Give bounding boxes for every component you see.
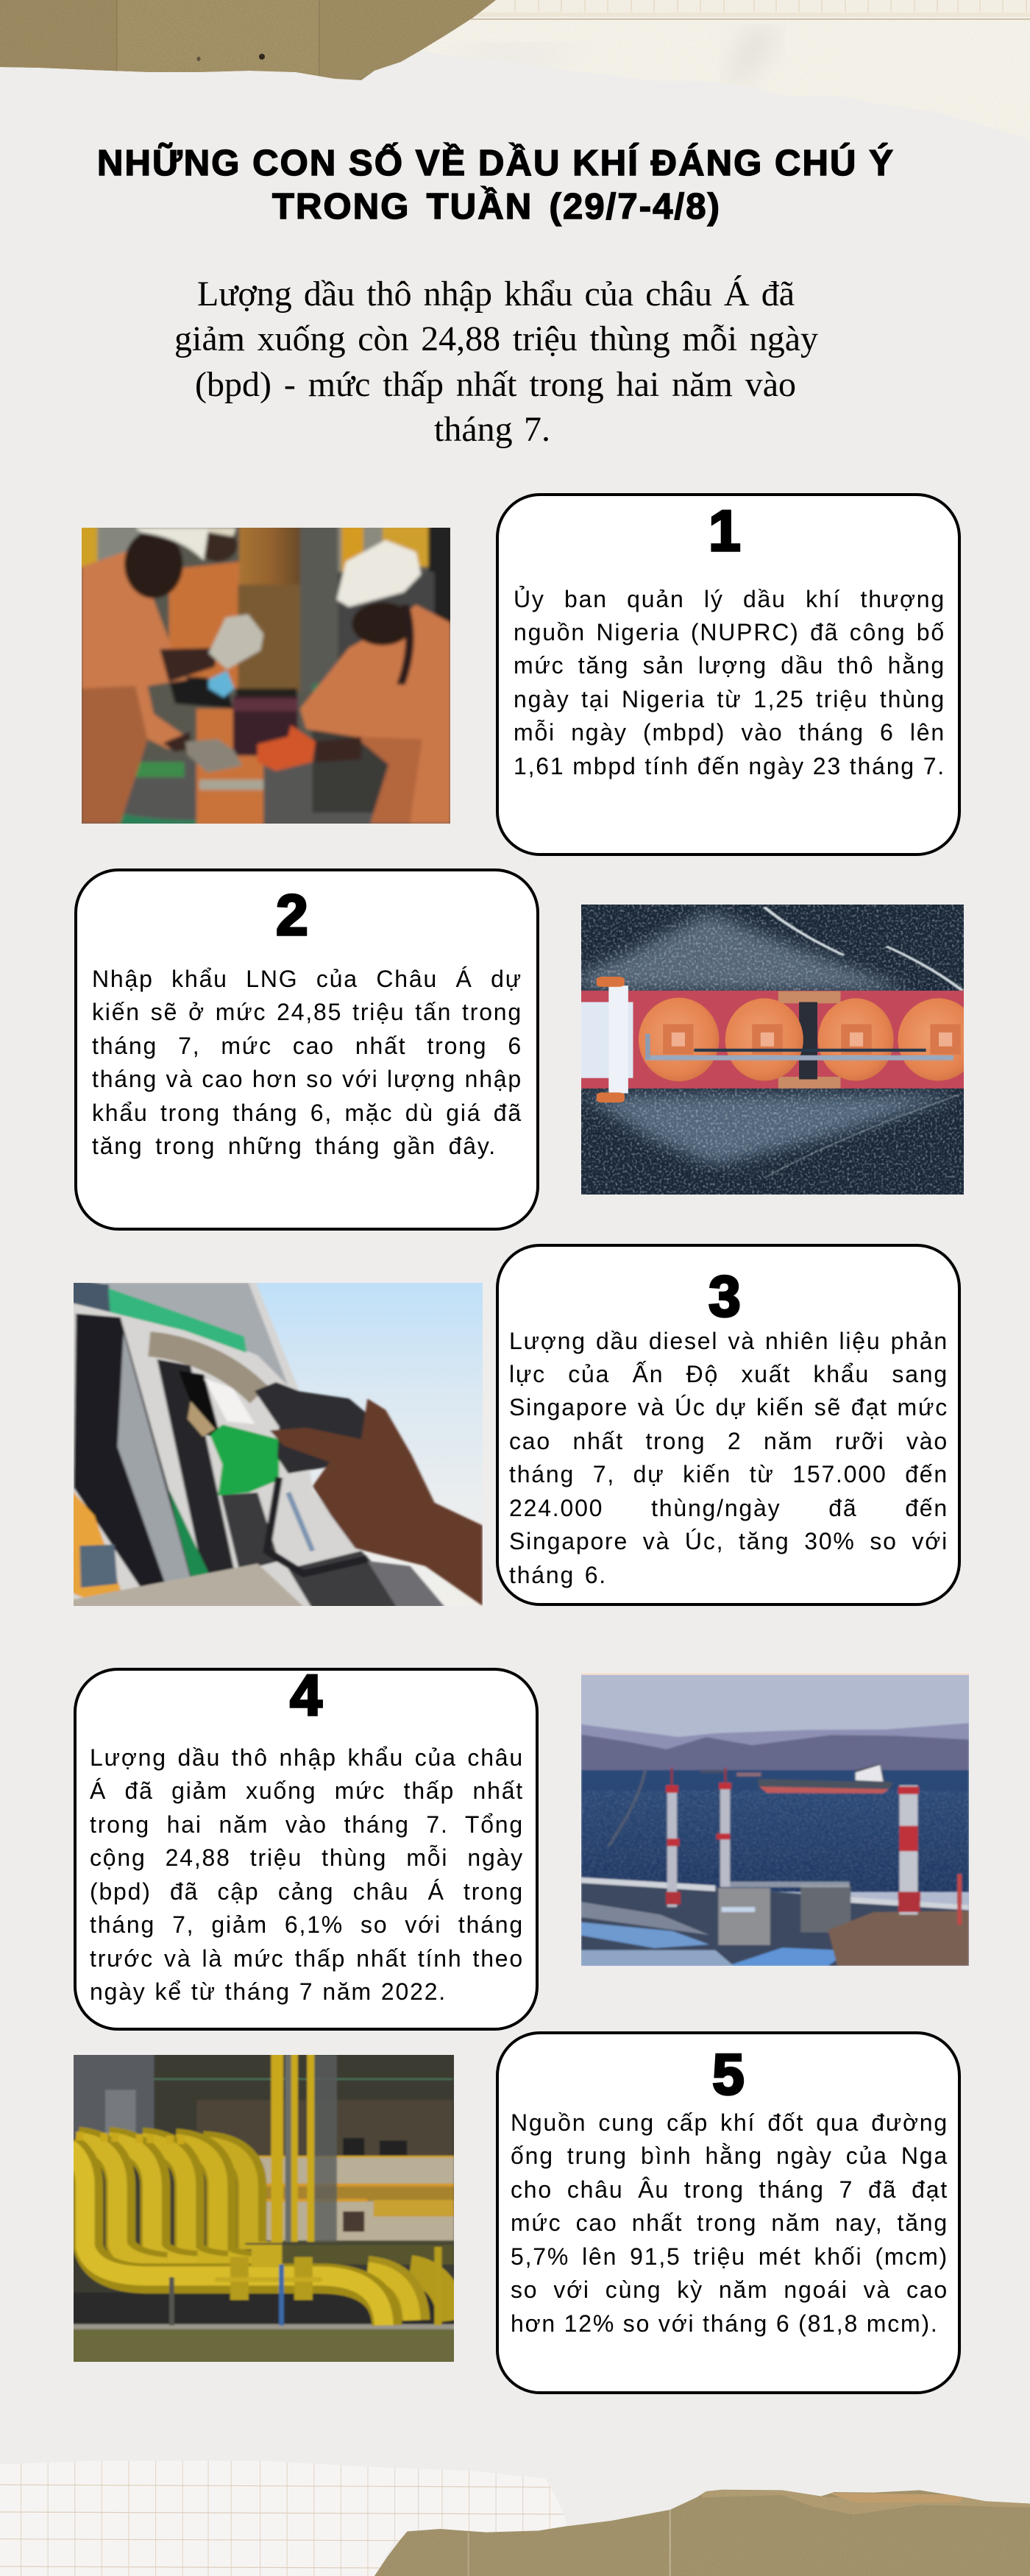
text: fact 5 bbox=[511, 2109, 948, 2337]
text: fact 3: tháng 7, dự kiến từ 157.000 đến bbox=[509, 1461, 948, 1487]
torn paper header background bbox=[0, 0, 1030, 137]
text: fact 2: tăng trong những tháng gần đây. bbox=[92, 1133, 497, 1159]
title: TRONG TUẦN (29/7-4/8) bbox=[272, 187, 721, 227]
text: fact 4: Lượng dầu thô nhập khẩu của châu bbox=[90, 1744, 524, 1771]
subtitle: tháng 7. bbox=[434, 410, 550, 449]
text: fact 4: (bpd) đã cập cảng châu Á trong bbox=[90, 1878, 524, 1905]
graph paper scrap bbox=[0, 2461, 564, 2576]
text: fact 3 bbox=[509, 1328, 948, 1588]
text: fact 5: mức cao nhất trong năm nay, tăng bbox=[511, 2209, 948, 2236]
text: fact 2: khẩu trong tháng 6, mặc dù giá đã bbox=[92, 1100, 522, 1126]
text: fact 3: tháng 6. bbox=[509, 1562, 607, 1588]
panel: fact 1 bbox=[496, 493, 961, 856]
text: fact 1: Ủy ban quản lý dầu khí thượng bbox=[514, 586, 945, 612]
photo: LNG tanker from above bbox=[581, 905, 964, 1195]
text: fact 3: cao nhất trong 2 năm rưỡi vào bbox=[509, 1428, 948, 1454]
title: NHỮNG CON SỐ VỀ DẦU KHÍ ĐÁNG CHÚ Ý bbox=[97, 144, 895, 183]
right worker bbox=[300, 605, 450, 824]
torn paper footer background bbox=[0, 2461, 1030, 2576]
text: fact 5: hơn 12% so với tháng 6 (81,8 mcm). bbox=[511, 2310, 939, 2337]
text: fact 1: nguồn Nigeria (NUPRC) đã công bố bbox=[514, 619, 945, 645]
number 3: 3 bbox=[708, 1264, 741, 1328]
text: fact 3: 224.000 thùng/ngày đã đến bbox=[509, 1495, 948, 1521]
panel: fact 2 bbox=[74, 868, 539, 1231]
subtitle: Lượng dầu thô nhập khẩu của châu Á đã bbox=[197, 275, 795, 314]
text: fact 3: Lượng dầu diesel và nhiên liệu phản bbox=[509, 1328, 948, 1354]
photo: oil workers in orange coveralls bbox=[82, 528, 450, 824]
text: fact 1: ngày tại Nigeria từ 1,25 triệu thùng bbox=[514, 686, 945, 712]
subtitle: (bpd) - mức thấp nhất trong hai năm vào bbox=[195, 365, 796, 404]
subtitle bbox=[174, 275, 818, 449]
cardboard scrap bbox=[0, 0, 496, 80]
panel: fact 3 bbox=[496, 1244, 961, 1606]
text: fact 4: tháng 7, giảm 6,1% so với tháng bbox=[90, 1911, 524, 1938]
tanker deck bbox=[581, 991, 964, 1089]
text: fact 2: tháng và cao hơn so với lượng nhập bbox=[92, 1066, 522, 1092]
photo: yellow gas pipelines bbox=[74, 2055, 454, 2362]
text: fact 4: trước và là mức thấp nhất tính theo bbox=[90, 1945, 524, 1972]
text: fact 4: cộng 24,88 triệu thùng mỗi ngày bbox=[90, 1844, 524, 1871]
panel: fact 5 bbox=[496, 2031, 961, 2394]
number 2: 2 bbox=[276, 882, 308, 947]
text: fact 1: 1,61 mbpd tính đến ngày 23 tháng 7. bbox=[514, 753, 945, 779]
text: fact 1: mỗi ngày (mbpd) vào tháng 6 lên bbox=[514, 719, 945, 746]
text: fact 2: Nhập khẩu LNG của Châu Á dự bbox=[92, 966, 522, 992]
number 4: 4 bbox=[290, 1663, 322, 1727]
back worker bbox=[169, 562, 239, 688]
text: fact 5: cho châu Âu trong tháng 7 đã đạt bbox=[511, 2176, 948, 2203]
text: fact 2 bbox=[92, 966, 522, 1159]
text: fact 5: so với cùng kỳ năm ngoái và cao bbox=[511, 2276, 948, 2303]
text: fact 4 bbox=[90, 1744, 524, 2005]
number 5: 5 bbox=[712, 2042, 745, 2106]
photo: fuel nozzle at pump bbox=[74, 1283, 483, 1606]
white paper scrap bbox=[412, 0, 1030, 147]
text: fact 4: trong hai năm vào tháng 7. Tổng bbox=[90, 1811, 524, 1838]
text: fact 2: kiến sẽ ở mức 24,85 triệu tấn trong bbox=[92, 999, 522, 1025]
text: fact 3: Singapore và Úc, tăng 30% so với bbox=[509, 1528, 948, 1554]
text: fact 5: 5,7% lên 91,5 triệu mét khối (mcm) bbox=[511, 2243, 948, 2270]
text: fact 3: lực của Ấn Độ xuất khẩu sang bbox=[509, 1361, 948, 1387]
title bbox=[97, 142, 895, 227]
left worker bbox=[82, 551, 187, 824]
number 1: 1 bbox=[708, 498, 741, 563]
text: fact 5: ống trung bình hằng ngày của Nga bbox=[511, 2142, 948, 2169]
text: fact 3: Singapore và Úc dự kiến sẽ đạt mức bbox=[509, 1394, 948, 1420]
text: fact 1 bbox=[514, 586, 945, 779]
text: fact 4: ngày kể từ tháng 7 năm 2022. bbox=[90, 1978, 447, 2005]
text: fact 4: Á đã giảm xuống mức thấp nhất bbox=[90, 1777, 524, 1804]
cardboard scrap bbox=[368, 2488, 1030, 2576]
text: fact 1: mức tăng sản lượng dầu thô hằng bbox=[514, 652, 945, 679]
photo: oil terminal with tanker at sea bbox=[581, 1673, 969, 1966]
text: fact 2: tháng 7, mức cao nhất trong 6 bbox=[92, 1033, 522, 1059]
text: fact 5: Nguồn cung cấp khí đốt qua đường bbox=[511, 2109, 948, 2136]
panel: fact 4 bbox=[74, 1668, 539, 2031]
subtitle: giảm xuống còn 24,88 triệu thùng mỗi ngày bbox=[174, 319, 818, 358]
